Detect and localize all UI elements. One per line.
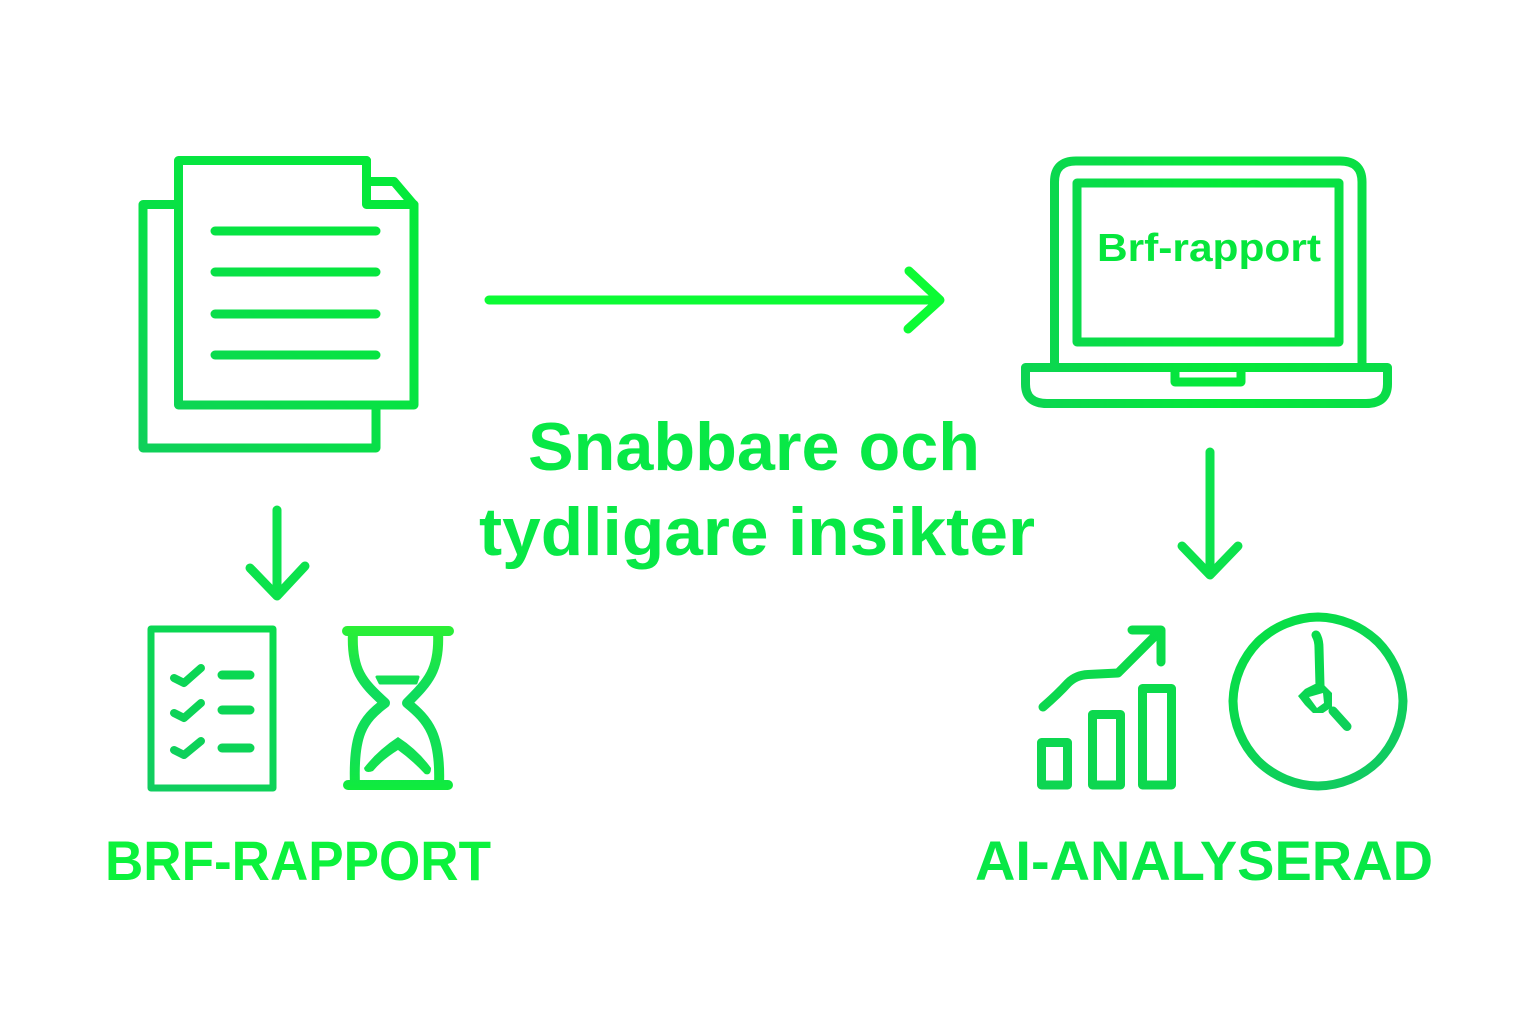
icon: laptop <box>1026 161 1388 404</box>
arrow: down to BRF-rapport icons <box>250 510 305 596</box>
icon: stacked documents <box>143 160 414 448</box>
heading: central message: Snabbare och <box>528 409 980 485</box>
label: AI-ANALYSERAD: AI-ANALYSERAD <box>975 829 1433 892</box>
icon: hourglass <box>347 631 449 785</box>
icon: clock <box>1233 617 1403 786</box>
icon: growth bar chart <box>1042 630 1172 785</box>
heading: central message <box>479 409 1035 570</box>
label: BRF-RAPPORT: BRF-RAPPORT <box>105 829 491 892</box>
heading: central message: tydligare insikter <box>479 494 1035 570</box>
laptop screen label: Brf-rapport <box>1097 227 1321 270</box>
arrow: down to AI icons <box>1182 452 1238 575</box>
icon: checklist <box>151 629 273 788</box>
arrow: document to laptop <box>489 271 940 329</box>
